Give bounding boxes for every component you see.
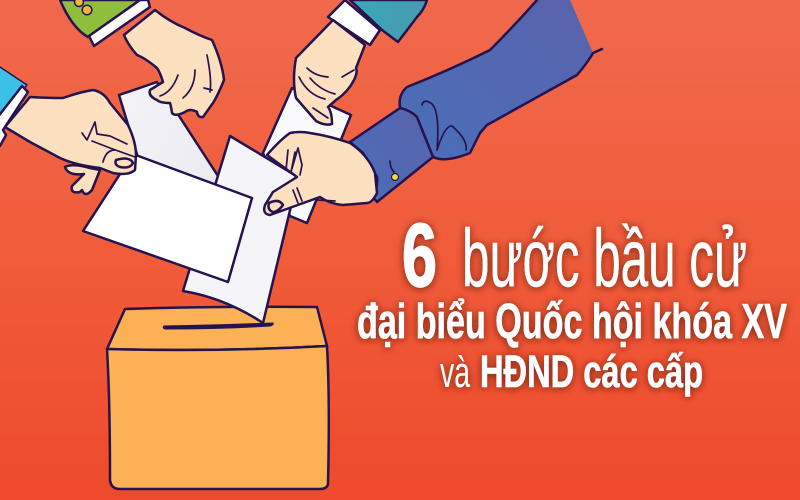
title line 1: 6 bước bầu cử [402, 206, 747, 306]
large front ballot paper [83, 154, 252, 282]
hand: top right with teal sleeve [294, 0, 427, 125]
ballot box [107, 307, 329, 489]
hand: left fingers behind ballot [65, 165, 100, 194]
title line 3: và HĐND các cấp: HĐND các cấp [480, 346, 703, 397]
title line 3: và HĐND các cấp: và [440, 348, 470, 397]
title line 3: và HĐND các cấp [440, 346, 703, 397]
ballot paper behind, held by top hand [119, 82, 218, 230]
hand: right with blue rolled sleeve [264, 0, 602, 215]
hand: top with green sleeve [60, 0, 224, 117]
ballot paper behind, held by top-right hand [263, 88, 351, 223]
title text [357, 206, 787, 397]
hand: left with blue sleeve [0, 65, 136, 174]
title line 1: 6 bước bầu cử: 6 [402, 206, 437, 306]
ballot paper in the centre, entering slot [183, 136, 298, 323]
